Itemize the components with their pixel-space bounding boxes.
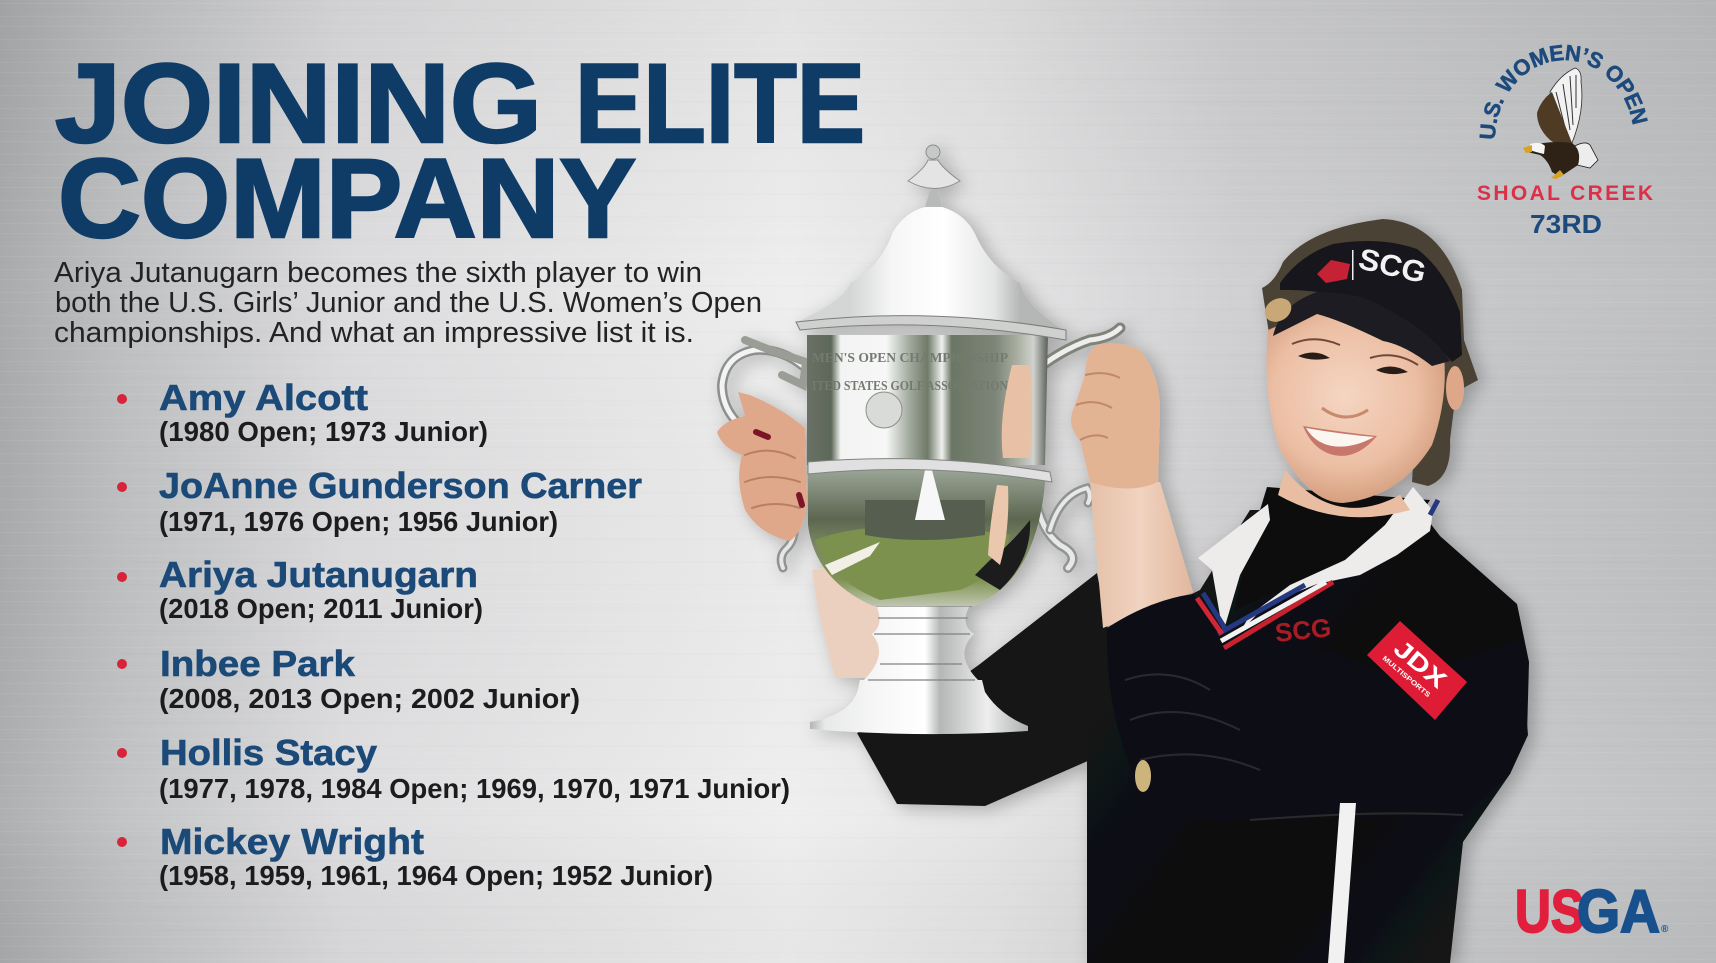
logo venue: SHOAL CREEK: [1477, 182, 1653, 205]
list item: Hollis Stacy: Hollis Stacy: [160, 732, 377, 773]
trophy inscription: MEN'S OPEN CHAMPIONSHIP: [812, 351, 1008, 366]
intro text: [54, 257, 762, 349]
neck: [1278, 470, 1410, 517]
right hand: [1071, 343, 1160, 488]
medal ribbon: [1197, 500, 1438, 648]
list item: Inbee Park: Inbee Park: [160, 643, 356, 684]
visor brim: [1273, 292, 1450, 366]
trophy inscription: ITED STATES GOLF ASSOCIATION: [812, 379, 1008, 394]
trophy inscription: [812, 351, 1008, 394]
title: COMPANY: [58, 136, 636, 261]
list item: Inbee Park: [117, 643, 580, 714]
chest logo: SCG: [1273, 612, 1333, 648]
trophy base: [810, 680, 1028, 734]
list item: Hollis Stacy: [117, 732, 790, 804]
intro text: both the U.S. Girls’ Junior and the U.S. Women’s Open: [55, 287, 762, 319]
JDX sleeve patch: [1367, 621, 1467, 720]
trophy seal: [866, 392, 902, 428]
trophy upper bowl: [807, 335, 1048, 465]
right sleeve: [1107, 594, 1528, 821]
trophy rim: [796, 316, 1066, 340]
left sleeve: [857, 573, 1110, 806]
face: [1266, 308, 1445, 503]
logo: USGA: ®: [1661, 924, 1669, 935]
list item: Inbee Park: (2008, 2013 Open; 2002 Junior): [159, 683, 580, 714]
trophy stem: [862, 593, 980, 682]
list item: Ariya Jutanugarn: [117, 554, 483, 624]
list item: JoAnne Gunderson Carner: (1971, 1976 Open; 1956 Junior): [159, 506, 558, 537]
turtleneck: [1235, 487, 1430, 610]
visor logo: [1317, 243, 1429, 290]
logo: U.S. Women's Open: [1477, 44, 1653, 239]
right hand fingers: [1076, 373, 1120, 440]
left hand gripping handle: [717, 392, 807, 541]
JDX sleeve patch: MULTISPORTS: [1381, 655, 1431, 699]
visor pin: [1260, 293, 1296, 327]
photo: golfer holding trophy: [717, 145, 1529, 963]
bowl reflection: grass and crowd: [815, 470, 1030, 600]
logo eagle: [1523, 68, 1598, 179]
list of champions: [117, 377, 790, 891]
torso: [1087, 510, 1529, 963]
logo: USGA: [1515, 878, 1669, 945]
trophy handles: [722, 328, 1120, 568]
JDX sleeve patch: JDX: [1388, 635, 1451, 694]
list item: Mickey Wright: [117, 821, 713, 891]
trophy band: [808, 459, 1052, 482]
list item: Ariya Jutanugarn: (2018 Open; 2011 Junior): [159, 593, 483, 624]
list item: Ariya Jutanugarn: Ariya Jutanugarn: [159, 554, 478, 595]
trophy finial: [908, 145, 960, 207]
list item: JoAnne Gunderson Carner: JoAnne Gunderson Carner: [159, 465, 642, 506]
title: ELITE: [575, 41, 865, 166]
finger reflection: [1002, 365, 1032, 458]
logo arc text: U.S. WOMEN’S OPEN: [1479, 44, 1648, 139]
smile: [1303, 426, 1377, 456]
fingers and nails: [745, 432, 802, 508]
logo: USGA: US: [1515, 878, 1584, 945]
trophy lower bowl: [808, 470, 1046, 606]
list item: Mickey Wright: Mickey Wright: [160, 821, 424, 862]
trophy lid: [797, 207, 1066, 332]
eyes and brows: [1292, 339, 1418, 374]
nose: [1322, 408, 1368, 417]
intro text: Ariya Jutanugarn becomes the sixth player to win: [54, 257, 702, 289]
logo: USGA: GA: [1577, 878, 1660, 945]
collar: [1198, 487, 1433, 633]
list item: Amy Alcott: Amy Alcott: [159, 377, 368, 418]
visor logo: SCG: [1355, 243, 1429, 290]
title: [55, 41, 865, 261]
list item: Mickey Wright: (1958, 1959, 1961, 1964 Open; 1952 Junior): [159, 860, 713, 891]
intro text: championships. And what an impressive list it is.: [54, 317, 694, 349]
ear: [1446, 366, 1464, 410]
white jersey stripe: [1328, 803, 1356, 963]
list item: Amy Alcott: [117, 377, 488, 447]
sleeve folds: [1125, 674, 1463, 820]
hair: [1262, 219, 1478, 486]
right forearm: [1090, 482, 1193, 628]
left forearm behind trophy: [812, 560, 900, 678]
list item: Hollis Stacy: (1977, 1978, 1984 Open; 1969, 1970, 1971 Junior): [159, 773, 790, 804]
gold sleeve button: [1135, 760, 1151, 792]
trophy: [722, 145, 1120, 734]
logo edition: 73RD: [1530, 209, 1602, 239]
title: JOINING: [55, 41, 542, 166]
list item: Amy Alcott: (1980 Open; 1973 Junior): [159, 416, 488, 447]
visor band: [1280, 241, 1462, 362]
list item: JoAnne Gunderson Carner: [117, 465, 642, 537]
